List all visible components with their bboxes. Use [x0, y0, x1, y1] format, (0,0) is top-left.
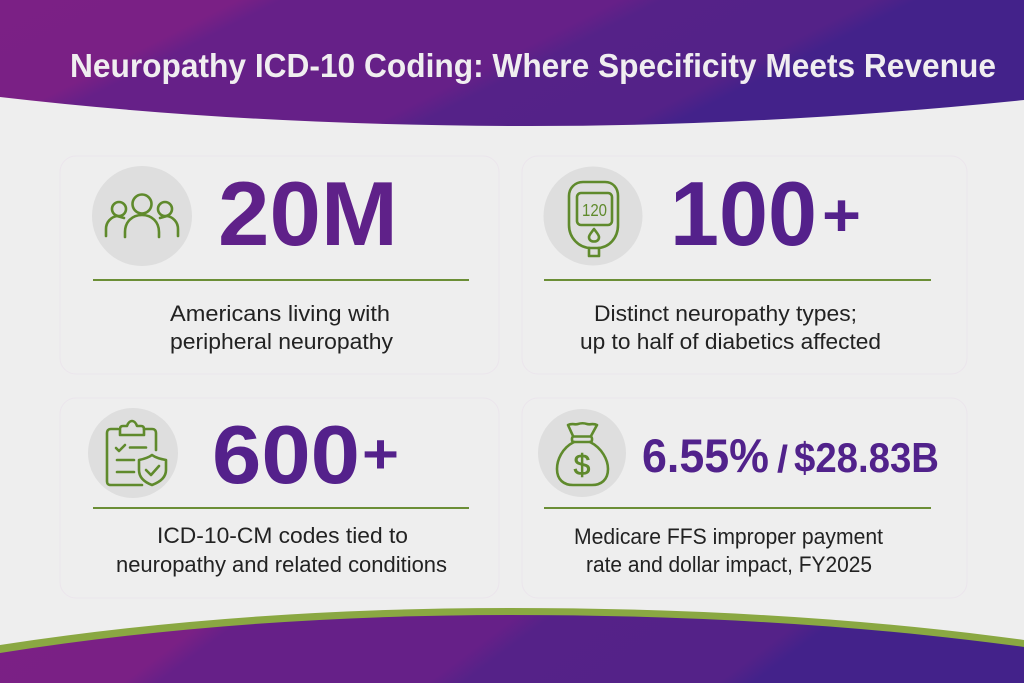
description: neuropathy and related conditions [116, 552, 447, 577]
icon: money bag: $ [574, 449, 591, 482]
divider [544, 279, 931, 281]
stat: plus: + [822, 182, 861, 249]
stat: rate and dollar impact: $28.83B [794, 434, 939, 481]
card outline [522, 398, 967, 598]
description [116, 523, 447, 577]
icon: glucose meter [544, 166, 642, 266]
stat: rate and dollar impact [642, 429, 939, 482]
card outline [60, 398, 499, 598]
description: peripheral neuropathy [170, 329, 393, 354]
divider [93, 279, 469, 281]
icon: money bag [538, 409, 626, 497]
description [574, 524, 883, 577]
stat: plus: + [362, 422, 399, 485]
divider [544, 507, 931, 509]
card outline [60, 156, 499, 374]
description: rate and dollar impact, FY2025 [586, 552, 872, 577]
icon: people group [92, 166, 192, 266]
description: ICD-10-CM codes tied to [157, 523, 408, 548]
description: up to half of diabetics affected [580, 329, 881, 354]
card outline [522, 156, 967, 374]
divider [93, 507, 469, 509]
description: Distinct neuropathy types; [594, 301, 857, 326]
icon: clipboard with shield [88, 408, 178, 498]
panel: 20M Americans [60, 156, 499, 374]
panel: 600+ codes [60, 398, 499, 598]
description: Medicare FFS improper payment [574, 524, 883, 549]
stat: 20M: 20M [218, 164, 398, 265]
header banner [0, 0, 1024, 126]
footer banner [0, 608, 1024, 683]
panel: improper payment [522, 398, 967, 598]
stat: 100: 100 [670, 164, 817, 265]
icon: glucose meter: 120 [582, 200, 607, 220]
description [170, 301, 393, 354]
stat: rate and dollar impact: / [777, 439, 788, 481]
stat: 600: 600 [212, 408, 360, 501]
panel: 100+ neuropathy types [522, 156, 967, 374]
stat: rate and dollar impact: 6.55% [642, 429, 769, 482]
title: Neuropathy ICD-10 Coding: Where Specificity Meets Revenue [70, 47, 996, 84]
description [580, 301, 881, 354]
description: Americans living with [170, 301, 390, 326]
